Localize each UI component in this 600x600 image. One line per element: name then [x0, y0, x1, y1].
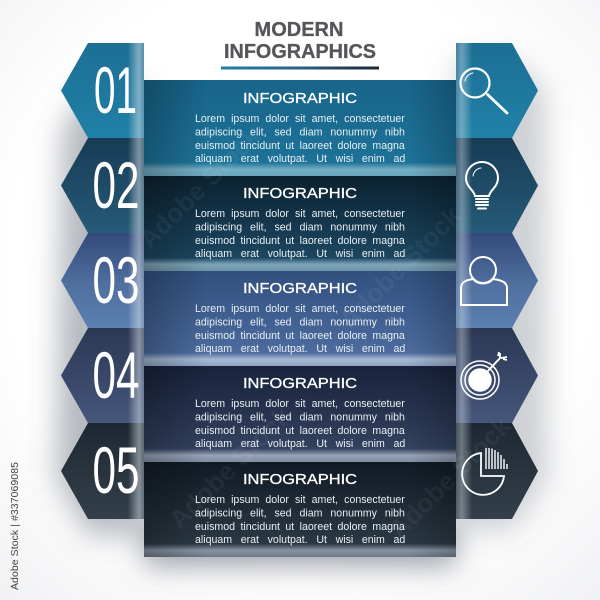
soft drop shadows	[56, 60, 548, 566]
tab 4	[61, 328, 144, 423]
panel 3 text: aliquam erat volutpat. Ut wisi enim ad	[195, 343, 405, 355]
panel 5 heading: INFOGRAPHIC	[243, 472, 357, 488]
title: MODERN	[255, 19, 343, 41]
watermark: Adobe Stock	[333, 200, 467, 334]
panel 2 text	[195, 208, 405, 260]
right tab 2	[456, 138, 538, 233]
panel 3 text	[195, 303, 405, 355]
tab 4: 04	[92, 338, 140, 412]
panel 5 text: euismod tincidunt ut laoreet dolore magna	[195, 521, 405, 533]
icon: magnifying glass	[460, 68, 507, 113]
right tab 3	[456, 233, 538, 328]
panel 4	[144, 366, 456, 462]
panel 3 text: Lorem ipsum dolor sit amet, consectetuer	[195, 303, 405, 315]
tab 5	[61, 423, 144, 519]
panel 1 text: adipiscing elit, sed diam nonummy nibh	[195, 126, 405, 138]
panel 1 text	[195, 113, 405, 165]
panel 5 text	[195, 494, 405, 546]
panel 2 text: adipiscing elit, sed diam nonummy nibh	[195, 222, 405, 234]
panel 5 text: aliquam erat volutpat. Ut wisi enim ad	[195, 534, 405, 546]
watermark	[133, 120, 517, 544]
right tab 5	[456, 423, 538, 519]
title	[224, 19, 376, 63]
panel 4 text: euismod tincidunt ut laoreet dolore magna	[195, 425, 405, 437]
icon: person	[461, 257, 507, 305]
panel 3 text: euismod tincidunt ut laoreet dolore magna	[195, 330, 405, 342]
panel 1 text: Lorem ipsum dolor sit amet, consectetuer	[195, 113, 405, 125]
tab 5: 05	[92, 433, 140, 507]
panel 1 heading: INFOGRAPHIC	[243, 91, 357, 107]
tab 2: 02	[92, 148, 140, 222]
panel 4 text: adipiscing elit, sed diam nonummy nibh	[195, 412, 405, 424]
side credit: Adobe Stock | #337069085	[9, 462, 21, 590]
panel 5 text: Lorem ipsum dolor sit amet, consectetuer	[195, 494, 405, 506]
panel 4 text	[195, 398, 405, 450]
panel 1	[144, 80, 456, 176]
icon: light bulb	[466, 162, 498, 208]
panel 3 heading: INFOGRAPHIC	[243, 281, 357, 297]
panel 5 text: adipiscing elit, sed diam nonummy nibh	[195, 508, 405, 520]
panel 5	[144, 462, 456, 557]
right tab 4	[456, 328, 538, 423]
panel 4 text: Lorem ipsum dolor sit amet, consectetuer	[195, 398, 405, 410]
panel 1 text: aliquam erat volutpat. Ut wisi enim ad	[195, 153, 405, 165]
tab 1	[61, 43, 144, 138]
panel 4 heading: INFOGRAPHIC	[243, 376, 357, 392]
panel 2 text: aliquam erat volutpat. Ut wisi enim ad	[195, 248, 405, 260]
panel 3	[144, 271, 456, 366]
panel 3 text: adipiscing elit, sed diam nonummy nibh	[195, 316, 405, 328]
tab 1: 01	[94, 53, 137, 127]
title underline	[221, 66, 379, 70]
panel 2	[144, 176, 456, 271]
tab 3	[61, 233, 144, 328]
panel 2 text: Lorem ipsum dolor sit amet, consectetuer	[195, 208, 405, 220]
watermark: Adobe Stock	[383, 410, 517, 544]
icon: target with arrow	[461, 352, 507, 399]
left arrow tabs	[61, 43, 144, 519]
tab 2	[61, 138, 144, 233]
watermark: Adobe Stock	[133, 120, 267, 254]
panel 2 text: euismod tincidunt ut laoreet dolore magna	[195, 235, 405, 247]
right arrow tabs	[456, 43, 538, 519]
icon: pie chart	[462, 448, 507, 495]
title: INFOGRAPHICS	[224, 41, 376, 63]
watermark: Adobe Stock	[163, 400, 297, 534]
panel 2 heading: INFOGRAPHIC	[243, 186, 357, 202]
right tab 1	[456, 43, 538, 138]
panel 1 text: euismod tincidunt ut laoreet dolore magna	[195, 140, 405, 152]
panel 4 text: aliquam erat volutpat. Ut wisi enim ad	[195, 438, 405, 450]
tab 3: 03	[92, 243, 140, 317]
